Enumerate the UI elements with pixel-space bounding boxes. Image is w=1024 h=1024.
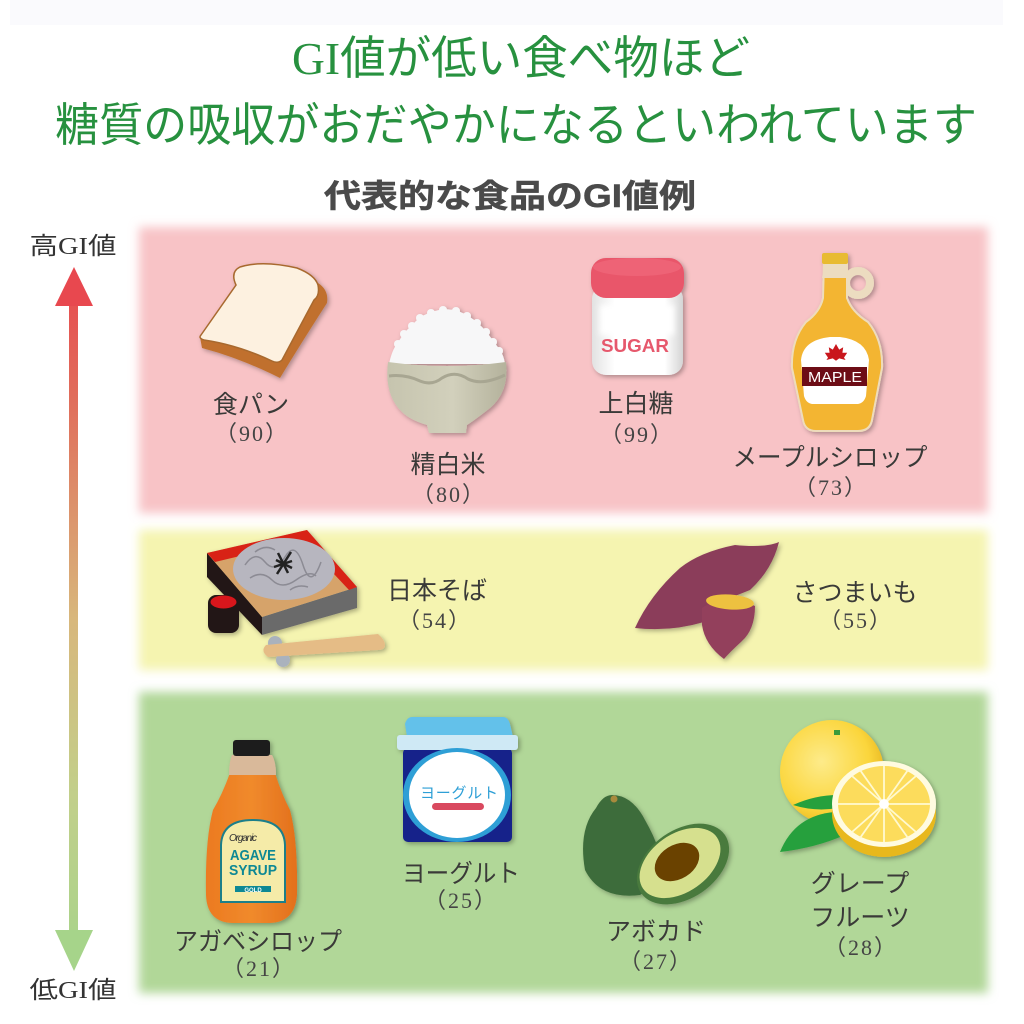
- label: soba: 日本そば: [387, 577, 487, 605]
- icon: maple syrup bottle: MAPLE: [808, 369, 862, 386]
- label: sweet potato: （55）: [819, 608, 893, 633]
- title: [55, 32, 977, 151]
- label: white rice: [410, 451, 486, 507]
- icon: sugar jar: SUGAR: [601, 336, 669, 356]
- label: white rice: 精白米: [410, 451, 486, 479]
- title: GI値が低い食べ物ほど: [292, 32, 750, 84]
- label: white sugar: （99）: [600, 422, 674, 447]
- panel: medium GI background: [139, 530, 988, 670]
- label: bread: [213, 391, 289, 446]
- label: grapefruit: グレープ: [811, 870, 909, 898]
- label: avocado: （27）: [619, 949, 693, 974]
- label: bread: 食パン: [213, 391, 289, 419]
- axis label: high: 高GI値: [30, 233, 116, 260]
- label: yogurt: ヨーグルト: [402, 860, 520, 888]
- subtitle: 代表的な食品のGI値例: [324, 178, 696, 214]
- label: white sugar: 上白糖: [598, 390, 674, 418]
- label: maple syrup: （73）: [794, 475, 868, 500]
- icon: grapefruit: [780, 720, 936, 857]
- icon: soba tray: [207, 530, 385, 667]
- label: agave syrup: [174, 928, 342, 981]
- label: avocado: アボカド: [606, 918, 706, 946]
- icon: sugar jar: [591, 258, 684, 375]
- label: white rice: （80）: [412, 482, 486, 507]
- icon: rice bowl: [387, 306, 507, 433]
- label: maple syrup: メープルシロップ: [732, 444, 928, 472]
- icon: sweet potato: [635, 542, 779, 659]
- label: maple syrup: [732, 444, 928, 500]
- icon: yogurt cup: ヨーグルト: [420, 785, 498, 802]
- icon: maple syrup bottle: [792, 253, 882, 431]
- icon: agave syrup bottle: GOLD: [244, 888, 262, 894]
- icon: agave syrup bottle: SYRUP: [229, 862, 277, 879]
- panel: high GI background: [139, 227, 988, 513]
- icon: agave syrup bottle: Organic: [229, 833, 257, 844]
- panel: low GI background: [139, 692, 988, 993]
- label: avocado: [606, 918, 706, 974]
- icon: bread: [200, 264, 327, 378]
- label: yogurt: （25）: [424, 888, 498, 913]
- icon: agave syrup bottle: AGAVE: [230, 847, 276, 864]
- axis label: low: 低GI値: [30, 977, 116, 1004]
- label: grapefruit: （28）: [824, 935, 898, 960]
- icon: yogurt cup: [397, 717, 518, 842]
- label: sweet potato: さつまいも: [792, 579, 918, 607]
- icon: agave syrup bottle: [206, 740, 297, 923]
- label: grapefruit: フルーツ: [810, 904, 910, 932]
- top band: [10, 0, 1003, 25]
- label: white sugar: [598, 390, 674, 447]
- GI axis arrow: [55, 267, 93, 971]
- label: grapefruit: [810, 870, 910, 960]
- label: soba: （54）: [398, 608, 472, 633]
- label: agave syrup: アガベシロップ: [174, 928, 342, 956]
- icon: avocado: [583, 795, 744, 921]
- label: bread: （90）: [215, 421, 289, 446]
- label: agave syrup: （21）: [222, 956, 296, 981]
- label: sweet potato: [792, 579, 918, 633]
- title: 糖質の吸収がおだやかになるといわれています: [55, 99, 977, 151]
- label: yogurt: [402, 860, 520, 913]
- label: soba: [387, 577, 487, 633]
